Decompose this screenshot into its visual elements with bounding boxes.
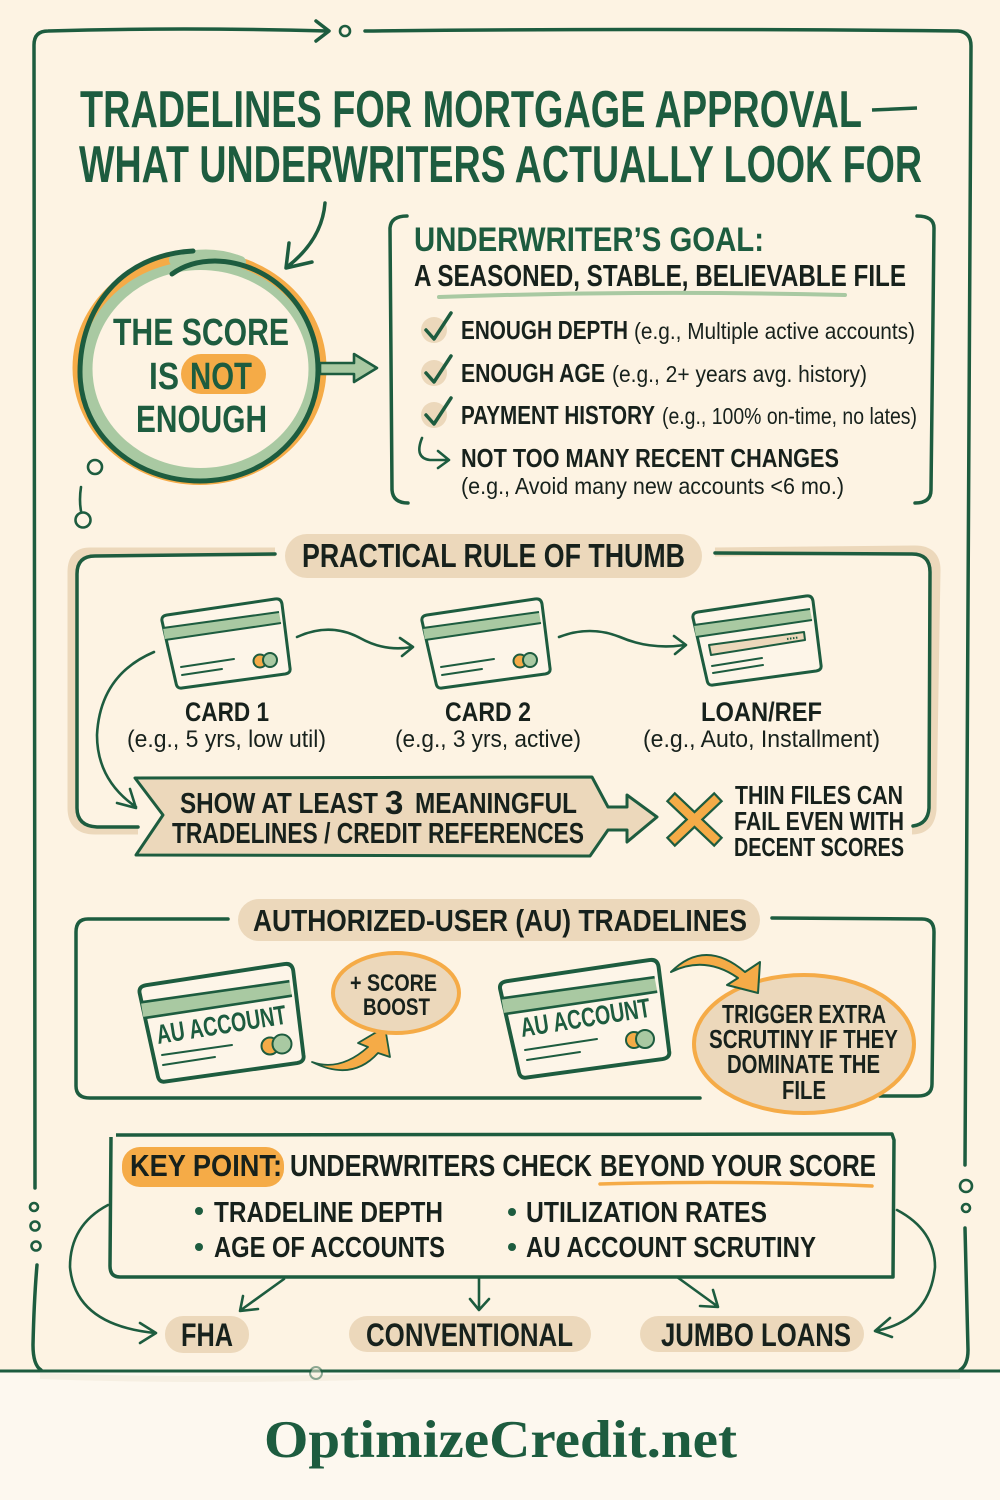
AU card 2: AU ACCOUNT xyxy=(518,993,653,1043)
card 2: (e.g., 3 yrs, active) xyxy=(395,726,581,753)
panel: authorized-user tradelines xyxy=(76,899,934,1113)
loan type: FHA: FHA xyxy=(181,1317,233,1353)
bubble: extra scrutiny: SCRUTINY IF THEY xyxy=(709,1024,898,1054)
arrow: to extra scrutiny xyxy=(671,955,760,993)
panel: key point: KEY POINT: xyxy=(130,1148,282,1183)
circle: the score is not enough: THE SCORE xyxy=(113,312,289,354)
banner: show at least 3 xyxy=(135,777,657,856)
AU card 1 xyxy=(139,964,304,1082)
arrows: key point to loan types xyxy=(70,1205,935,1343)
card 1: CARD 1 xyxy=(185,697,269,727)
panel: key point xyxy=(110,1134,894,1277)
checklist: ENOUGH DEPTH xyxy=(461,315,628,345)
warning text xyxy=(734,780,904,862)
card 2: CARD 2 xyxy=(445,697,531,727)
bullets: AGE OF ACCOUNTS xyxy=(214,1232,445,1264)
warning text: THIN FILES CAN xyxy=(735,780,903,810)
side bubbles xyxy=(30,1180,972,1250)
arrow: to score boost xyxy=(312,1027,390,1070)
warning text: DECENT SCORES xyxy=(734,832,904,862)
banner: show at least 3: 3 xyxy=(385,784,403,821)
arrow: card 1 to banner xyxy=(97,652,154,808)
loan reference: (e.g., Auto, Installment) xyxy=(643,726,880,753)
AU card 1: AU ACCOUNT xyxy=(154,1000,289,1050)
card 1: (e.g., 5 yrs, low util) xyxy=(127,726,326,753)
heading: practical rule of thumb: PRACTICAL RULE OF THUMB xyxy=(302,537,685,574)
bullets: TRADELINE DEPTH xyxy=(214,1197,443,1229)
bubble: score boost xyxy=(333,953,459,1033)
panel: practical rule of thumb xyxy=(72,534,936,862)
bubble: extra scrutiny: TRIGGER EXTRA xyxy=(722,999,886,1029)
checklist: (e.g., Multiple active accounts) xyxy=(634,318,915,344)
checklist: PAYMENT HISTORY xyxy=(461,400,655,430)
circle: the score is not enough: ENOUGH xyxy=(136,399,267,441)
AU card 2 xyxy=(500,960,669,1078)
circle: the score is not enough: IS xyxy=(149,356,179,398)
banner: show at least 3: TRADELINES / CREDIT REFERENCES xyxy=(172,818,584,850)
checklist: NOT TOO MANY RECENT CHANGES xyxy=(461,443,839,473)
arrow: card 2 to loan xyxy=(559,631,686,654)
checklist: (e.g., 100% on-time, no lates) xyxy=(662,403,917,429)
footer xyxy=(0,1367,1000,1500)
title xyxy=(79,81,922,194)
bullets: AU ACCOUNT SCRUTINY xyxy=(526,1232,816,1264)
bullets xyxy=(195,1197,816,1264)
bullets: UTILIZATION RATES xyxy=(526,1197,767,1229)
heading: AU tradelines: AUTHORIZED-USER (AU) TRADELINES xyxy=(253,903,747,938)
footer: OptimizeCredit.net xyxy=(264,1411,737,1469)
arrow: circle to goal panel xyxy=(320,354,377,382)
arrow: card 1 to card 2 xyxy=(297,630,413,656)
decorative bubbles xyxy=(76,460,102,528)
loan reference: LOAN/REF xyxy=(701,697,822,727)
card 1 xyxy=(127,599,326,753)
loan type: conventional: CONVENTIONAL xyxy=(366,1317,573,1353)
icon: orange cross xyxy=(675,801,714,838)
bubble: score boost: + SCORE xyxy=(350,970,437,997)
circle: the score is not enough: NOT xyxy=(190,356,252,398)
checklist: (e.g., 2+ years avg. history) xyxy=(612,361,867,387)
arrow: title to circle xyxy=(286,203,325,268)
loan type: jumbo loans: JUMBO LOANS xyxy=(661,1317,851,1353)
panel: underwriter's goal xyxy=(390,216,934,503)
banner: show at least 3: MEANINGFUL xyxy=(415,788,577,820)
bubble: extra scrutiny: DOMINATE THE xyxy=(727,1049,880,1079)
bubble: extra scrutiny: FILE xyxy=(782,1075,826,1105)
loan reference xyxy=(643,596,880,753)
panel: underwriter's goal: UNDERWRITER’S GOAL: xyxy=(414,221,764,259)
checklist: ENOUGH AGE xyxy=(461,358,605,388)
panel: key point: BEYOND YOUR SCORE xyxy=(600,1148,876,1183)
circle: the score is not enough xyxy=(72,251,326,485)
banner: show at least 3: SHOW AT LEAST xyxy=(180,788,378,820)
bubble: extra scrutiny xyxy=(694,975,914,1113)
checklist: (e.g., Avoid many new accounts <6 mo.) xyxy=(461,473,844,499)
warning text: FAIL EVEN WITH xyxy=(734,806,904,836)
bubble: score boost: BOOST xyxy=(363,994,430,1021)
card 2 xyxy=(395,599,581,753)
checklist xyxy=(419,313,917,499)
panel: key point: UNDERWRITERS CHECK xyxy=(290,1148,592,1183)
